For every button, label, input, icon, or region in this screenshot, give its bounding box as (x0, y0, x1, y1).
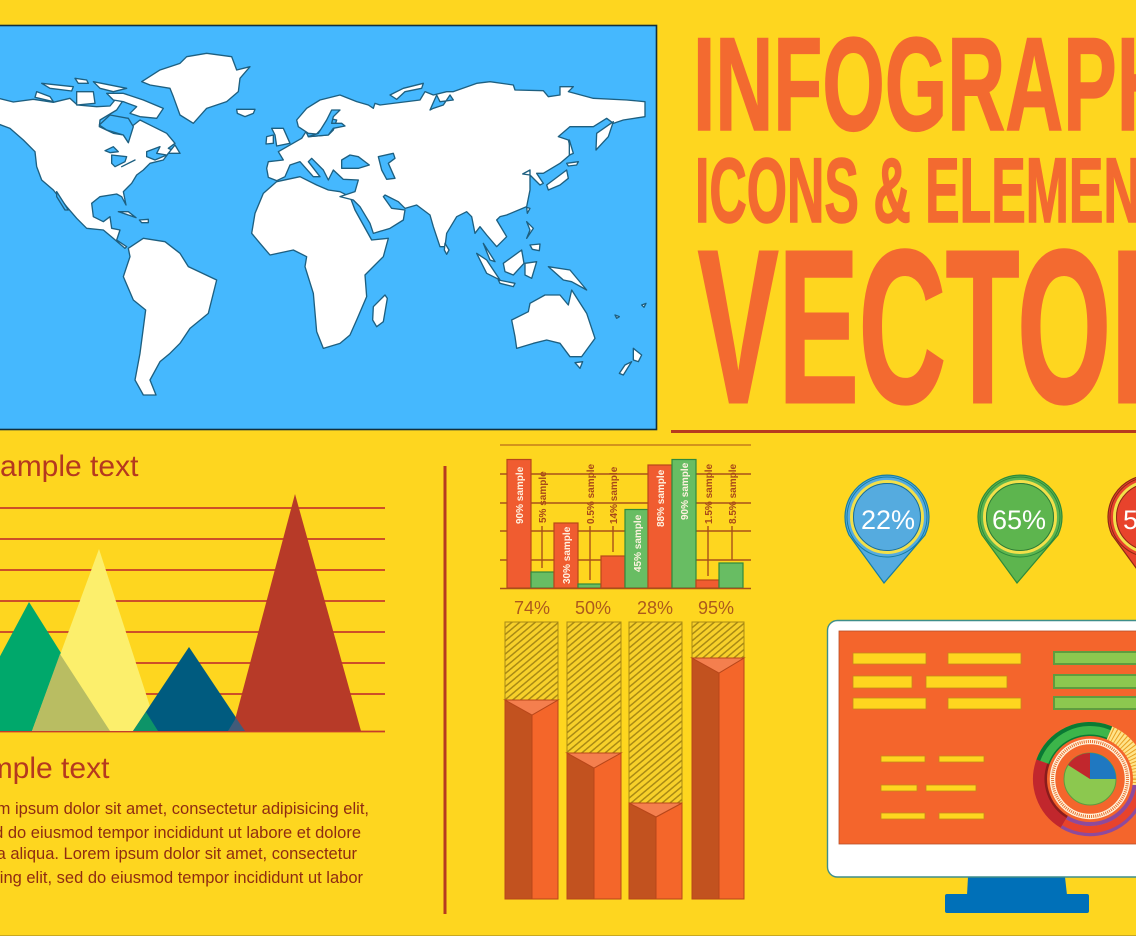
chart: small bar chart: 45% sample (633, 514, 644, 572)
triangle: red (232, 494, 361, 731)
chart: triangles (0, 494, 385, 732)
chart: small bar chart: 5% sample (538, 471, 549, 523)
chart: small bar chart: 30% sample (562, 526, 573, 584)
chart: small bar chart: 14% sample (609, 466, 620, 524)
text block: lorem ipsum (0, 800, 369, 887)
chart: small bar chart (500, 445, 751, 588)
chart: bar 74% (505, 622, 558, 899)
pie chart (1064, 753, 1116, 805)
label: 95%: 95% (698, 598, 734, 618)
label: 28%: 28% (637, 598, 673, 618)
triangle: green (0, 602, 110, 731)
panel: world map (0, 26, 656, 430)
chart: bar 95% (692, 622, 744, 899)
chart: small bar chart: 90% sample (515, 466, 526, 524)
icon: green pin 65% (978, 475, 1062, 583)
monitor frame (828, 620, 1136, 877)
monitor screen (839, 631, 1136, 844)
triangle overlap: green and yellow (32, 654, 110, 731)
monitor stand (967, 877, 1067, 895)
chart: small bar chart: 88% sample (656, 469, 667, 527)
chart: small bar chart: 0.5% sample (586, 464, 597, 524)
icon: monitor (828, 620, 1136, 913)
icon: blue pin 22% (845, 475, 929, 583)
donut chart (1032, 722, 1136, 836)
triangle overlap: yellow and blue (133, 712, 158, 731)
label: 50%: 50% (575, 598, 611, 618)
triangle overlap: blue and red (228, 718, 245, 731)
triangle: yellow (32, 549, 158, 731)
title (693, 11, 1136, 449)
continents and islands (0, 53, 646, 395)
label: 74%: 74% (514, 598, 550, 618)
icon: red pin (1108, 475, 1136, 583)
chart: bar 50% (567, 622, 621, 899)
chart: small bar chart: 8.5% sample (728, 464, 739, 524)
chart: small bar chart: 90% sample (680, 462, 691, 520)
chart: bar 28% (629, 622, 682, 899)
chart: small bar chart: 1.5% sample (704, 464, 715, 524)
icon: green pin 65%: 65% (992, 505, 1046, 535)
icon: blue pin 22%: 22% (861, 505, 915, 535)
triangle: dark blue (133, 647, 245, 731)
monitor base (945, 894, 1089, 913)
